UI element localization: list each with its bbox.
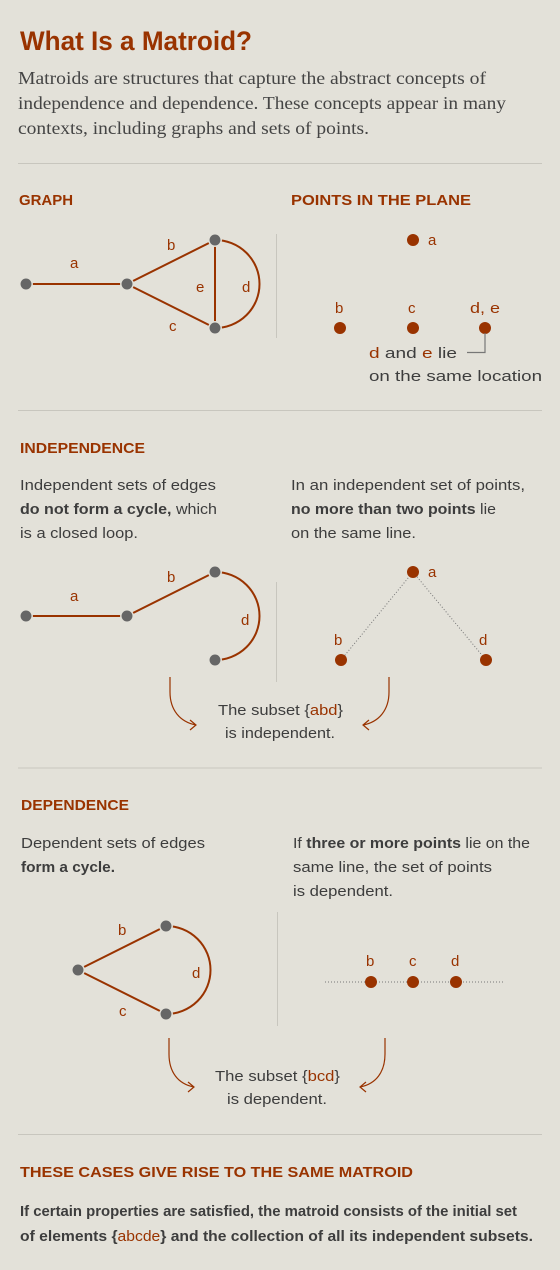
dependent points: c: [409, 953, 417, 970]
text: independent points: In an independent set of points,: [291, 477, 525, 494]
text: dependent edges: form a cycle.: [21, 859, 115, 876]
independent points: b: [334, 632, 342, 649]
intro text: [18, 68, 506, 138]
independent points: d: [479, 632, 487, 649]
dependent graph: c: [119, 1003, 127, 1020]
dependent points: [325, 953, 503, 988]
heading: graph: GRAPH: [19, 192, 73, 209]
points diagram: [334, 232, 542, 385]
text: independent points: on the same line.: [291, 525, 416, 542]
graph diagram: c: [169, 318, 177, 335]
conclusion text: If certain properties are satisfied, the matroid consists of the initial set: [20, 1203, 517, 1220]
caption: dependent subset: is dependent.: [227, 1091, 327, 1108]
arrow: left to independent caption: [170, 677, 196, 730]
independent graph: a: [70, 588, 79, 605]
points diagram: a: [428, 232, 437, 249]
text: independent points: no more than two points lie: [291, 501, 496, 518]
heading: independence: INDEPENDENCE: [20, 440, 145, 457]
text: dependent edges: Dependent sets of edges: [21, 835, 205, 852]
graph diagram: b: [167, 237, 175, 254]
text: independent points: [291, 477, 525, 542]
intro text: Matroids are structures that capture the abstract concepts of: [18, 68, 486, 88]
arrow: right to dependent caption: [360, 1038, 385, 1092]
graph diagram: [20, 234, 259, 335]
dependent graph: [72, 920, 210, 1020]
dependent points: b: [366, 953, 374, 970]
text: dependent points: is dependent.: [293, 883, 393, 900]
text: independent edges: is a closed loop.: [20, 525, 138, 542]
heading: points in the plane: POINTS IN THE PLANE: [291, 192, 471, 209]
independent graph: [20, 566, 259, 666]
graph diagram: a: [70, 255, 79, 272]
title: What Is a Matroid?: [20, 26, 252, 56]
text: dependent edges: [21, 835, 205, 876]
arrow: right to independent caption: [363, 677, 389, 730]
points diagram: b: [335, 300, 343, 317]
text: dependent points: If three or more points lie on the: [293, 835, 530, 852]
caption: dependent subset: [215, 1068, 340, 1108]
intro text: independence and dependence. These concepts appear in many: [18, 93, 506, 113]
points diagram: d and e lie: [369, 345, 457, 362]
text: independent edges: Independent sets of edges: [20, 477, 216, 494]
points diagram: on the same location: [369, 368, 542, 385]
arrow: left to dependent caption: [169, 1038, 194, 1092]
text: independent edges: [20, 477, 217, 542]
conclusion text: [20, 1203, 533, 1245]
caption: independent subset: is independent.: [225, 725, 335, 742]
conclusion text: of elements { abcde} and the collection of all its independent subsets.: [20, 1228, 533, 1245]
graph diagram: e: [196, 279, 204, 296]
dependent graph: d: [192, 965, 200, 982]
caption: dependent subset: The subset { bcd}: [215, 1068, 340, 1085]
points diagram: c: [408, 300, 416, 317]
text: dependent points: same line, the set of points: [293, 859, 492, 876]
heading: dependence: DEPENDENCE: [21, 797, 129, 814]
dependent points: d: [451, 953, 459, 970]
independent graph: d: [241, 612, 249, 629]
intro text: contexts, including graphs and sets of points.: [18, 118, 369, 138]
heading: same matroid: THESE CASES GIVE RISE TO THE SAME MATROID: [20, 1164, 413, 1181]
points diagram: d, e: [470, 300, 500, 317]
text: dependent points: [293, 835, 530, 900]
text: independent edges: do not form a cycle, which: [20, 501, 217, 518]
caption: independent subset: The subset { abd}: [218, 702, 343, 719]
independent points: [334, 564, 492, 666]
caption: independent subset: [218, 702, 343, 742]
independent graph: b: [167, 569, 175, 586]
dependent graph: b: [118, 922, 126, 939]
graph diagram: d: [242, 279, 250, 296]
independent points: a: [428, 564, 437, 581]
